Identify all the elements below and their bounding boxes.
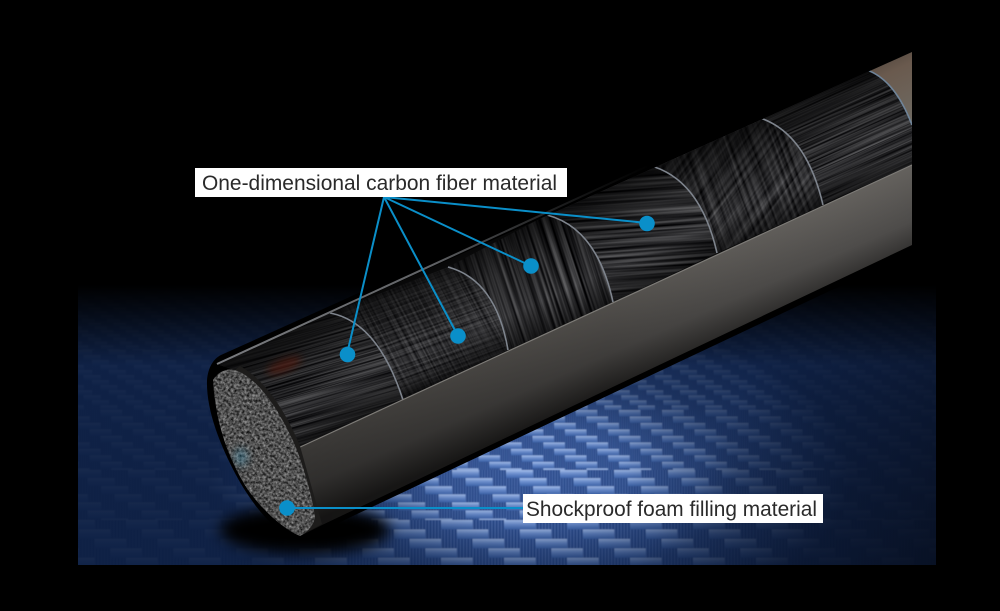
gray outer sheath xyxy=(298,165,912,534)
carbon segment 6 xyxy=(763,76,912,204)
foam end dark rim xyxy=(236,367,314,498)
carbon segment 5 xyxy=(656,120,822,252)
label: carbon fiber: One-dimensional carbon fiber material xyxy=(202,172,557,195)
carbon weave floor xyxy=(70,280,945,570)
tube ground shadow xyxy=(220,506,390,554)
tube top edge highlight xyxy=(216,179,619,365)
tube outer black shell xyxy=(206,295,820,518)
carbon tube cutaway xyxy=(206,52,912,536)
carbon segment 1 xyxy=(219,314,402,446)
carbon layers xyxy=(218,52,912,446)
foam core end cap xyxy=(213,370,315,536)
callout: carbon fiber leader lines xyxy=(347,197,647,354)
carbon segment 3 xyxy=(450,216,612,350)
rust stain xyxy=(265,353,303,377)
label: foam: Shockproof foam filling material xyxy=(526,498,817,521)
cylinder shading xyxy=(218,72,912,446)
tan end segment xyxy=(870,52,912,122)
layer separators xyxy=(330,70,912,400)
blue tint on foam xyxy=(234,448,248,466)
callout: foam leader line and dot xyxy=(279,500,524,516)
carbon segment 2 xyxy=(332,267,508,398)
callout dots: carbon fiber xyxy=(340,216,655,362)
carbon segment 4 xyxy=(549,168,716,302)
